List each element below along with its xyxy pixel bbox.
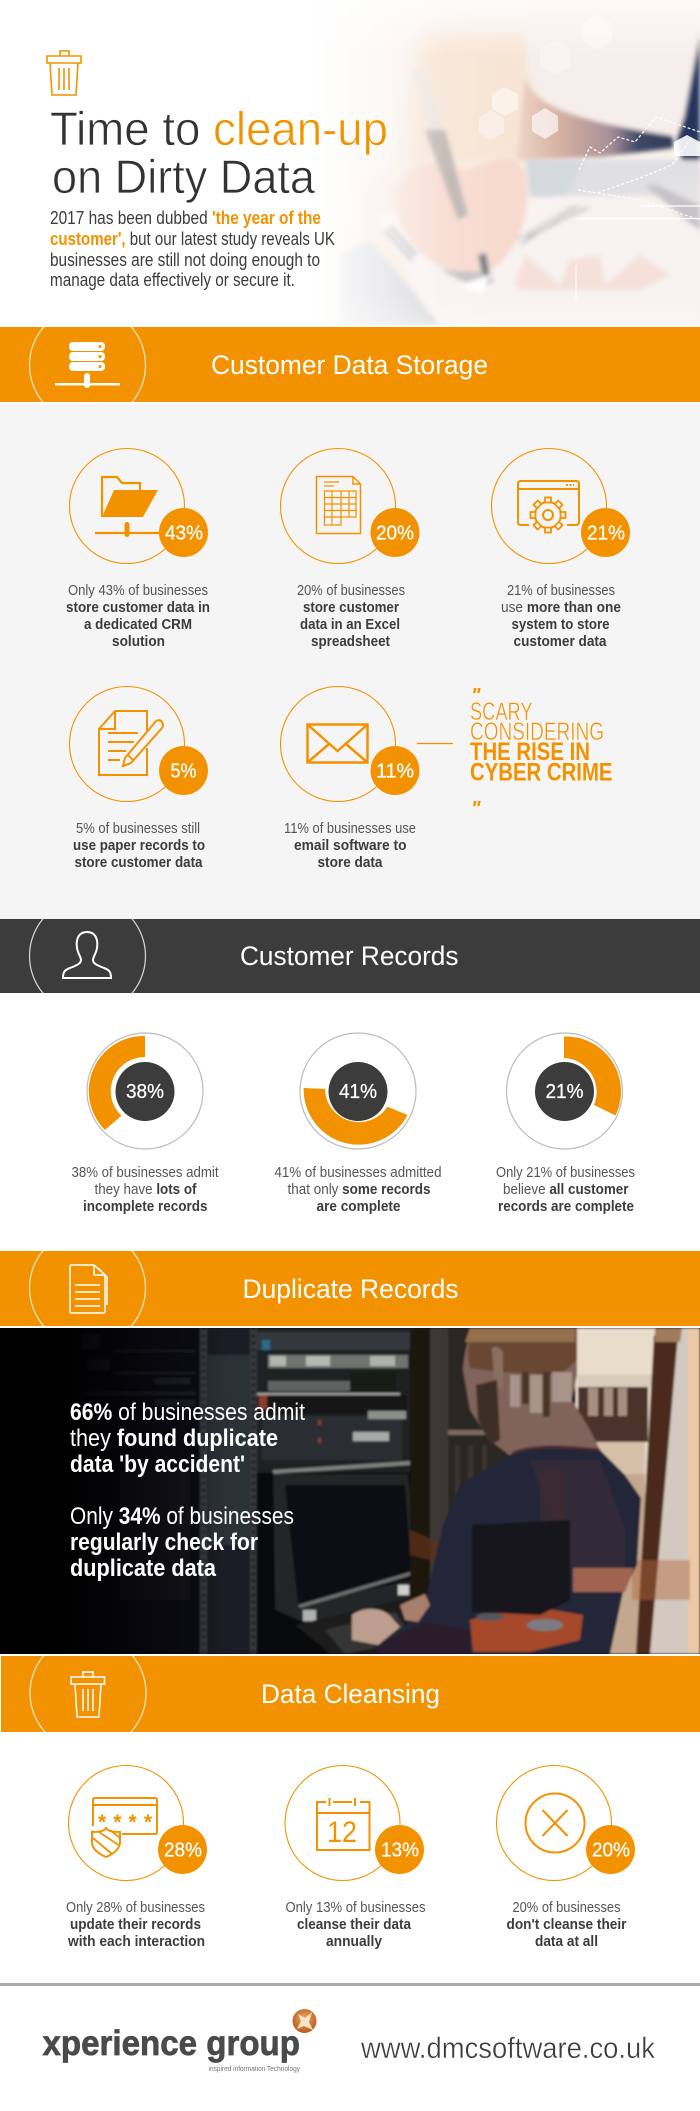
hexagons [479,87,700,156]
caption [506,1900,627,1950]
header photo: hand writing on charts [343,7,700,325]
triangles [515,255,670,290]
caption: 38% of businesses admit [72,1165,218,1181]
icon: person [63,932,111,978]
photo text: they found duplicate [70,1425,278,1452]
left white fade [300,7,455,325]
caption [274,1165,442,1215]
laptop [645,185,700,232]
ring [280,686,396,802]
caption: with each interaction [67,1934,205,1950]
intro text: 2017 has been dubbed 'the year of the [50,208,321,228]
heading: Customer Data Storage [211,350,488,380]
head [462,1342,600,1456]
ring [492,448,606,564]
banner: Customer Records [0,919,700,993]
icon: document [70,1265,107,1313]
caption: use more than one [501,600,621,616]
stat card: 43% dedicated CRM [66,448,210,650]
caption: a dedicated CRM [84,617,192,633]
tie [677,33,700,177]
caption: 5% of businesses still [76,821,200,837]
caption: update their records [70,1917,201,1933]
badge: 43% [165,522,203,544]
value: 38% [126,1081,164,1103]
connector line to quote [417,742,453,744]
badge [370,746,420,795]
caption: 21% of businesses [507,583,615,599]
caption: data at all [535,1934,598,1950]
stripes [385,205,590,260]
caption: store data [318,855,383,871]
hand [395,158,527,274]
callout quote: " [471,798,481,820]
caption: 11% of businesses use [284,821,416,837]
intro text [50,208,335,290]
heading: Data Cleansing [261,1679,440,1709]
mid columns [410,1328,430,1654]
shirt [526,36,700,140]
caption [297,583,405,650]
icon: password and shield: **** [98,1811,153,1834]
door frame [649,1328,690,1654]
heading: Duplicate Records [242,1274,458,1304]
caption: 41% of businesses admitted [274,1165,442,1181]
pen [428,95,440,126]
caption: customer data [514,634,607,650]
heading: Customer Records [240,941,458,971]
laptop [273,1474,420,1625]
caption: don't cleanse their [506,1917,627,1933]
caption: solution [112,634,165,650]
caption: they have lots of [94,1182,197,1198]
photo text: 66% of businesses admit [70,1399,305,1426]
title [50,102,388,203]
wall [573,1328,657,1498]
badge: 13% [381,1840,419,1862]
caption: annually [326,1934,382,1950]
banner: Duplicate Records [0,1251,700,1326]
hands [352,1609,400,1645]
icon: spreadsheet [316,476,360,534]
icon: server stack [55,342,120,388]
panel: customer data storage [0,404,700,919]
icon: orange trash can [47,51,81,95]
icon: calendar [317,1798,370,1850]
logo emblem [292,2009,316,2033]
badge [370,508,420,557]
intro text: manage data effectively or secure it. [50,270,295,290]
arc 38% [89,1036,145,1130]
logo: xperience group: inspired information Technology [208,2064,300,2073]
caption: store customer data [74,855,203,871]
caption [284,821,416,871]
caption [73,821,205,871]
title: Time to clean-up [50,102,388,155]
caption [66,1900,205,1950]
ring [280,448,396,564]
badge: 20% [376,522,414,544]
banner ring [28,327,146,402]
arc 21% [564,1036,621,1116]
caption: Only 43% of businesses [68,583,208,599]
stat card: 28% update records [66,1766,207,1950]
stat card: 11% email software [280,686,420,871]
caption: store customer [303,600,399,616]
intro text: customer', but our latest study reveals UK [50,229,335,249]
callout quote: CYBER CRIME [470,758,612,786]
paper [383,215,699,269]
chart lines [579,117,700,170]
icon: window with gear [518,481,579,532]
caption [496,1165,635,1215]
caption: incomplete records [83,1199,208,1215]
photo text: duplicate data [70,1555,217,1582]
behind hand [566,156,700,197]
caption [501,583,621,650]
photo: technician at server rack [0,1328,700,1654]
torso [373,1447,641,1654]
dark desk [345,242,438,325]
caption [66,583,210,650]
arc 41% [304,1088,408,1145]
badge [375,1825,424,1874]
caption: use paper records to [73,838,205,854]
caption: believe all customer [503,1182,629,1198]
badge [159,508,208,557]
badge: 5% [170,760,197,782]
panel: customer records [72,1033,635,1215]
callout quote: " [471,685,481,707]
icon: folder on network [95,477,160,537]
caption: Only 13% of businesses [286,1900,426,1916]
badge: 11% [376,760,414,782]
caption [72,1165,218,1215]
stat card: 5% paper records [70,686,208,871]
caption: that only some records [288,1182,430,1198]
stat card: 21% more than one system [492,448,630,650]
badge [586,1825,635,1874]
photo text: regularly check for [70,1529,258,1556]
logo: xperience group [42,2009,316,2073]
photo text [70,1399,305,1582]
caption: system to store [512,617,610,633]
intro text: businesses are still not doing enough to [50,250,320,270]
badge [159,746,208,795]
left dark overlay [0,1328,206,1654]
caption: Only 21% of businesses [496,1165,635,1181]
caption: Only 28% of businesses [66,1900,205,1916]
donut: 38% incomplete records [87,1033,203,1149]
donut: 41% some records complete [300,1033,416,1149]
ring [70,448,184,564]
wedge [517,78,673,160]
main rack [257,1328,420,1473]
donut: 21% all records complete [506,1033,622,1149]
stat card: 20% never cleanse [496,1766,635,1950]
icon: trash can [71,1672,104,1717]
icon: envelope [308,724,368,762]
photo text: data 'by accident' [70,1451,245,1478]
ring [285,1766,400,1880]
banner: Customer Data Storage [0,327,700,402]
badge: 20% [592,1840,630,1862]
ring [496,1766,612,1880]
title: on Dirty Data [52,150,316,203]
photo text: Only 34% of businesses [70,1503,294,1530]
caption: cleanse their data [297,1917,412,1933]
icon: calendar: 12 [327,1816,357,1849]
icon: cross in circle [526,1794,584,1852]
banner: Data Cleansing [1,1656,700,1732]
caption: 20% of businesses [297,583,405,599]
stat card: 20% Excel spreadsheet [280,448,420,650]
caption: are complete [316,1199,400,1215]
caption: records are complete [498,1199,634,1215]
icon: password and shield [92,1798,157,1857]
caption: spreadsheet [311,634,390,650]
badge [581,508,630,557]
badge: 28% [164,1840,202,1862]
caption: data in an Excel [300,617,400,633]
banner ring [28,919,146,993]
callout quote [470,685,612,820]
banner ring [29,1656,147,1732]
callout quote: THE RISE IN [470,738,590,766]
caption: 20% of businesses [512,1900,620,1916]
value: 21% [546,1081,584,1103]
dim racks [170,1328,200,1654]
callout quote: CONSIDERING [470,718,604,746]
badge [158,1825,207,1874]
logo: xperience group: xperience group [42,2024,300,2063]
icon: paper and pencil [99,711,163,775]
footer divider [0,1983,700,1986]
banner ring [28,1251,146,1326]
reflections [573,1568,634,1592]
stat card: 13% annual cleanse [285,1766,426,1950]
caption [286,1900,426,1950]
caption: store customer data in [66,600,210,616]
badge: 21% [587,522,625,544]
value: 41% [339,1081,377,1103]
callout quote: SCARY [470,698,533,726]
website url: www.dmcsoftware.co.uk [360,2032,656,2065]
ring [68,1766,184,1880]
ring [70,686,184,802]
caption: email software to [294,838,407,854]
panel: data cleansing [66,1766,635,1950]
